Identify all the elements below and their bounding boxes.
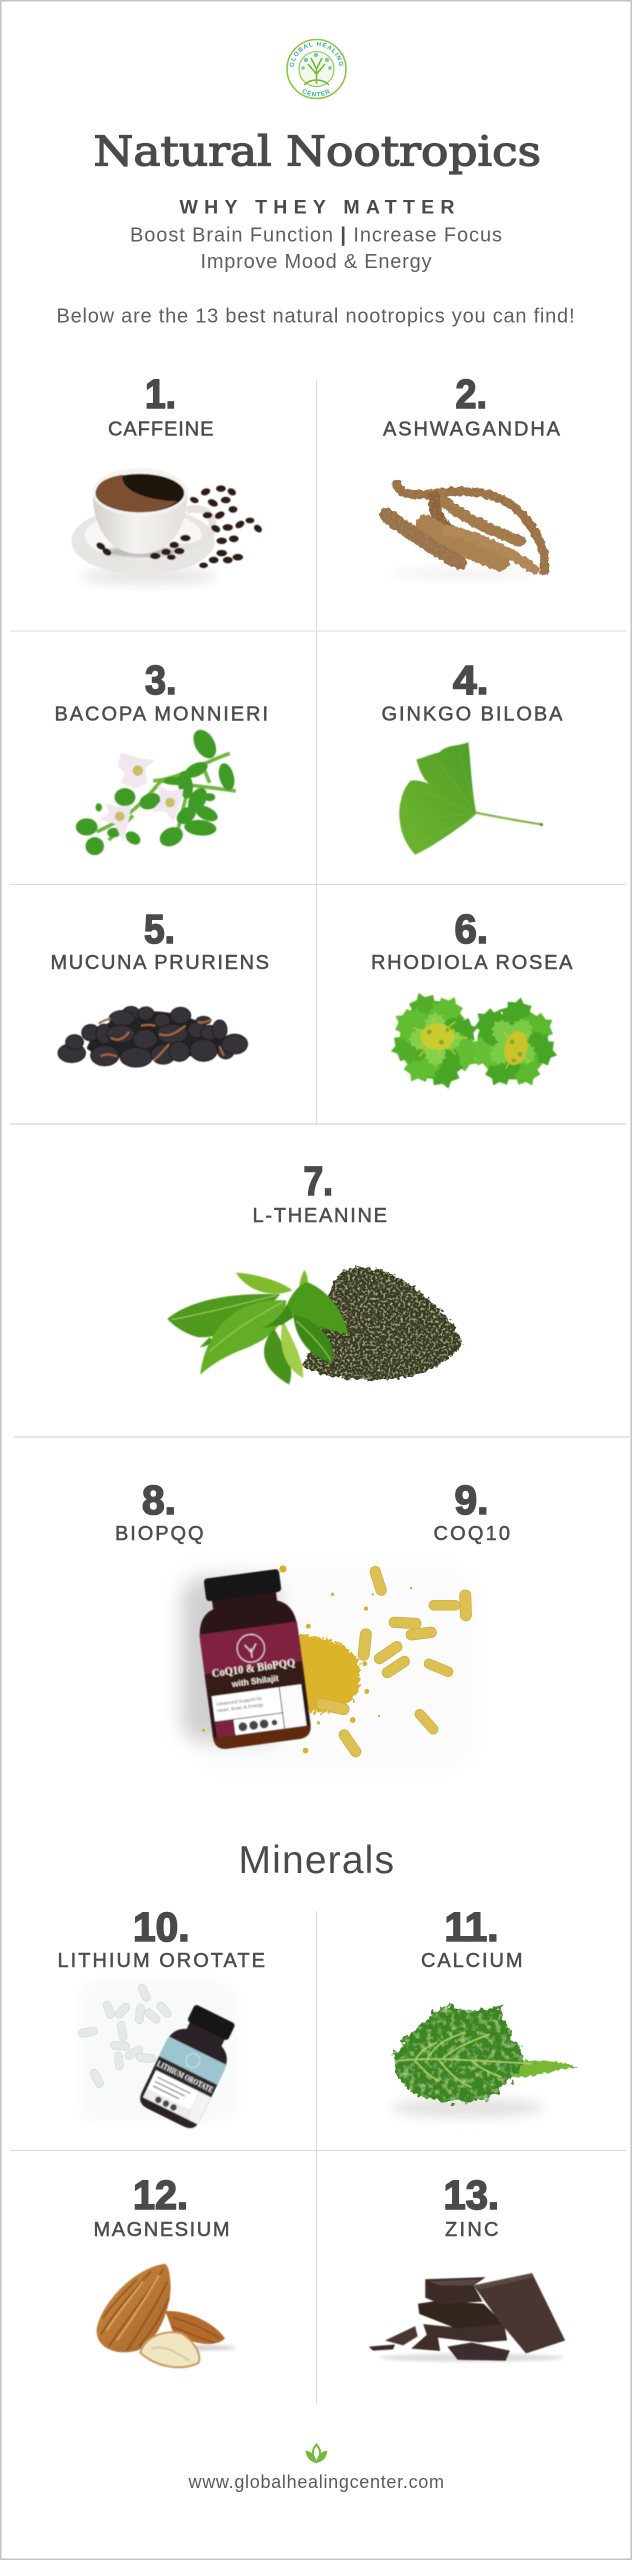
label: coq10: COQ10: [434, 1523, 510, 1545]
icon: dark chocolate pieces: [369, 2273, 565, 2362]
image: lithium orotate bottle and capsules: LITHIUM OROTATE: [155, 2059, 214, 2095]
label: caffeine: CAFFEINE: [108, 418, 214, 440]
panel: 1 caffeine: [71, 371, 263, 585]
icon: mucuna beans pile: [58, 1007, 248, 1067]
label: rhodiola rosea: RHODIOLA ROSEA: [371, 952, 573, 974]
title: Natural Nootropics: [94, 128, 541, 176]
logo: Global Healing Center: CENTER: [302, 89, 330, 96]
icon: green leaf mark: [306, 2445, 327, 2463]
number 10: 10.: [133, 1904, 190, 1950]
number 13: 13.: [444, 2172, 499, 2218]
label: calcium: CALCIUM: [421, 1950, 522, 1972]
label: l-theanine: L-THEANINE: [252, 1205, 387, 1227]
label: ginkgo biloba: GINKGO BILOBA: [382, 704, 563, 726]
text: benefits line one: Boost Brain Function | Increase Focus: [130, 224, 502, 246]
logo: Global Healing Center: GLOBAL HEALING: [290, 42, 344, 67]
panel: 10 lithium orotate: [58, 1904, 265, 2132]
panel: 12 magnesium: [94, 2172, 236, 2367]
icon: rhodiola rosettes: [386, 986, 562, 1094]
logo: Global Healing Center: [286, 38, 347, 100]
label: bacopa monnieri: BACOPA MONNIERI: [54, 704, 268, 726]
icon: kale leaf: [391, 2004, 578, 2118]
footer: [188, 2445, 444, 2492]
panel: 4 ginkgo biloba: [382, 657, 563, 855]
panel: 5 mucuna pruriens: [50, 906, 269, 1067]
panel: 6 rhodiola rosea: [371, 906, 573, 1094]
number 7: 7.: [304, 1158, 333, 1204]
number 3: 3.: [145, 657, 176, 703]
label: ashwagandha: ASHWAGANDHA: [383, 418, 561, 440]
icon: almonds: [97, 2264, 236, 2367]
number 12: 12.: [133, 2172, 188, 2218]
image: supplement bottle, powder and capsules: Advanced Support for: [216, 1695, 263, 1708]
number 6: 6.: [454, 906, 488, 952]
text: benefits line two: Improve Mood & Energy: [200, 251, 432, 273]
icon: ginkgo leaf: [399, 742, 543, 855]
label: mucuna pruriens: MUCUNA PRURIENS: [50, 952, 269, 974]
panel: 11 calcium: [391, 1904, 578, 2118]
image: supplement bottle, powder and capsules: CoQ10 & BioPQQ: [211, 1657, 296, 1680]
image: supplement bottle, powder and capsules: with Shilajit: [230, 1673, 279, 1689]
label: biopqq: BIOPQQ: [115, 1523, 204, 1545]
icon: ashwagandha roots: [387, 484, 545, 578]
label: magnesium: MAGNESIUM: [94, 2219, 230, 2241]
panel: 7 l-theanine: [167, 1158, 463, 1384]
text: website: www.globalhealingcenter.com: [188, 2472, 444, 2492]
number 2: 2.: [456, 371, 487, 417]
heading: minerals: Minerals: [238, 1839, 394, 1882]
grid dividers: nootropics: [10, 380, 630, 2404]
icon: green tea leaves and dried tea: [167, 1267, 463, 1384]
number 11: 11.: [444, 1904, 498, 1950]
image: supplement bottle, powder and capsules: [181, 1565, 476, 1770]
subheading: why they matter: WHY THEY MATTER: [180, 196, 454, 218]
number 9: 9.: [454, 1477, 488, 1523]
image: supplement bottle, powder and capsules: Heart, Brain & Energy: [216, 1702, 264, 1714]
text: intro sentence: Below are the 13 best natural nootropics you can find!: [56, 306, 574, 328]
number 8: 8.: [142, 1477, 176, 1523]
number 1: 1.: [145, 371, 176, 417]
image: lithium orotate bottle and capsules: [78, 1981, 244, 2132]
label: lithium orotate: LITHIUM OROTATE: [58, 1950, 265, 1972]
icon: coffee cup with beans: [71, 468, 263, 585]
number 4: 4.: [453, 657, 488, 703]
panel: 3 bacopa monnieri: [54, 657, 268, 855]
panel: 13 zinc: [369, 2172, 565, 2362]
label: zinc: ZINC: [445, 2219, 498, 2241]
number 5: 5.: [144, 906, 175, 952]
panel: 8 biopqq and 9 coq10: [115, 1477, 510, 1770]
panel: 2 ashwagandha: [383, 371, 561, 578]
icon: bacopa sprig: [76, 726, 237, 855]
